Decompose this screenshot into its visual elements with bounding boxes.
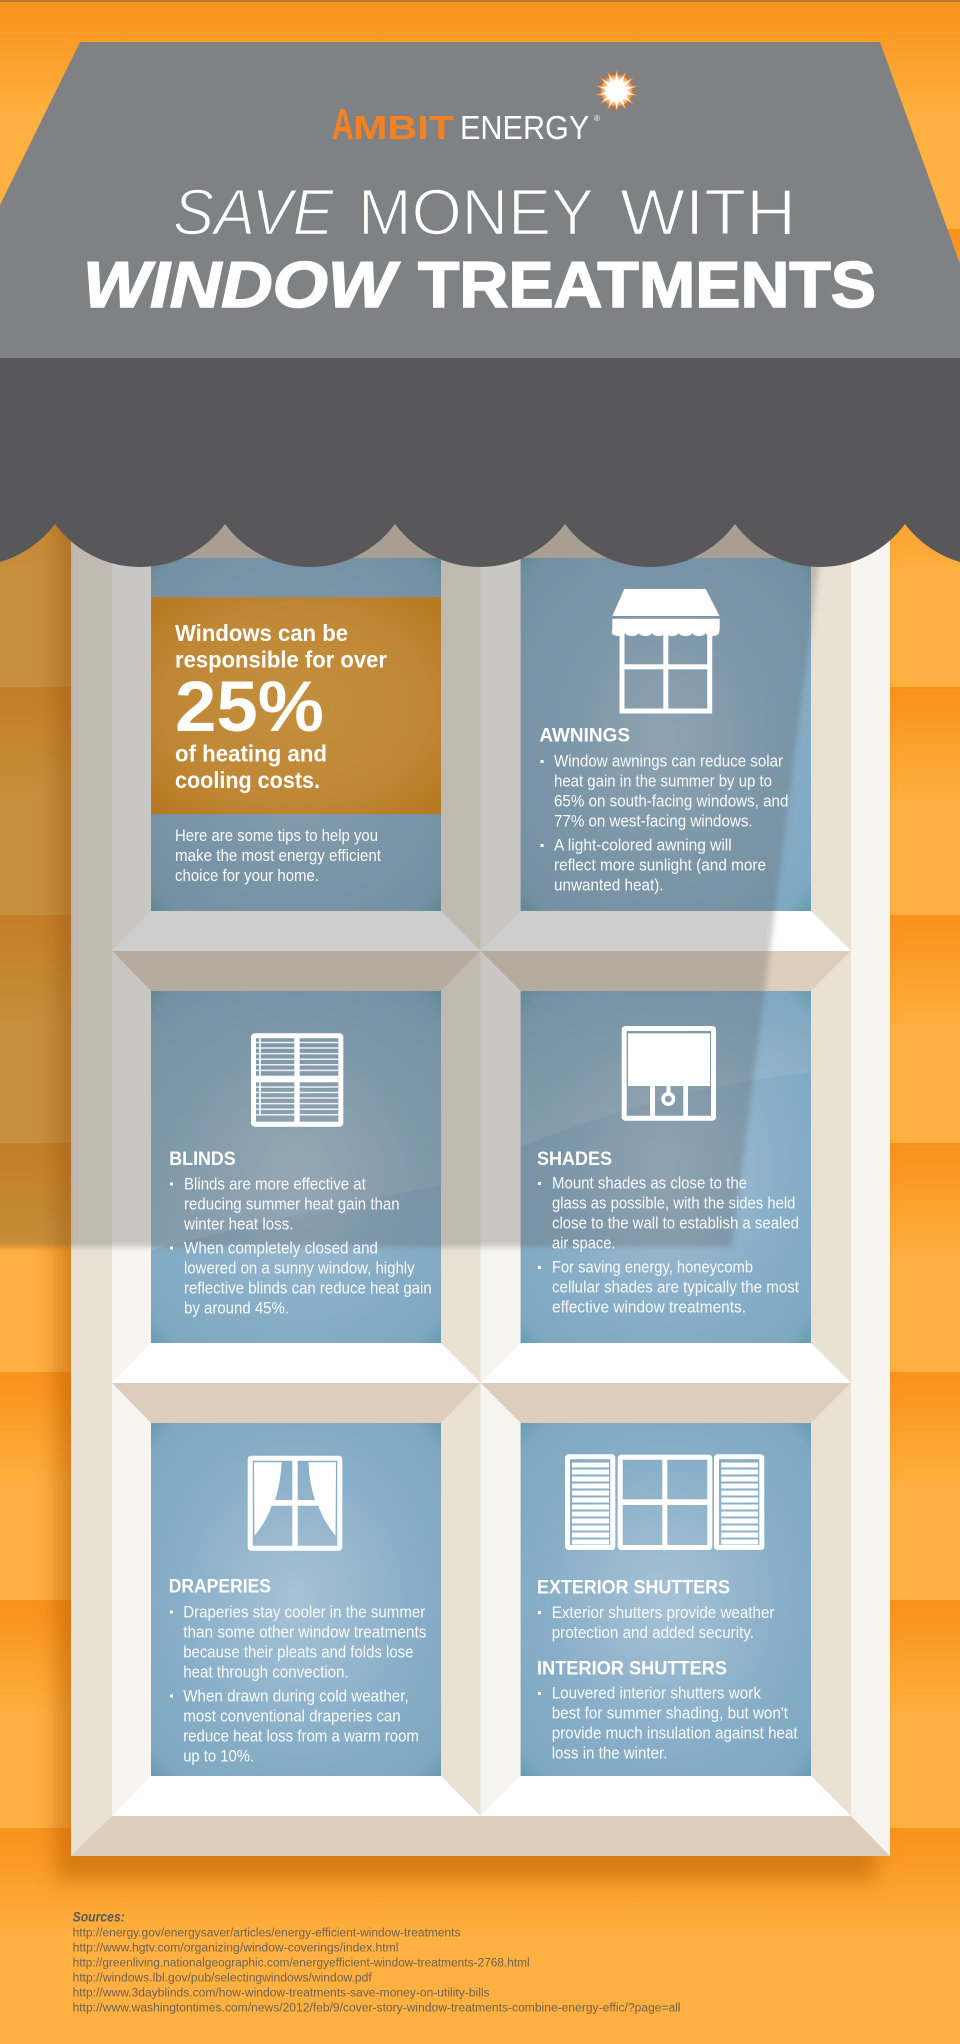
panel: shutters: loss in the winter. xyxy=(552,1745,667,1763)
icon: exterior shutters xyxy=(568,1457,762,1548)
logo: Ambit Energy xyxy=(332,68,639,149)
panel: shutters: Louvered interior shutters work xyxy=(552,1685,762,1703)
awning valance with scallops xyxy=(0,358,960,567)
panel: intro callout text: responsible for over xyxy=(175,646,387,672)
panel: awnings: reflect more sunlight (and more xyxy=(554,857,766,875)
panel: shades: glass as possible, with the sides held xyxy=(552,1195,795,1213)
panel: draperies: up to 10%. xyxy=(183,1747,254,1765)
panel: shades: air space. xyxy=(552,1235,615,1253)
title: WITH xyxy=(620,177,796,249)
panel: blinds: reflective blinds can reduce heat gain xyxy=(184,1279,432,1297)
panel: blinds: reducing summer heat gain than xyxy=(184,1195,400,1213)
sources: http://greenliving.nationalgeographic.com/energyefficient-window-treatments-2768.html xyxy=(73,1958,530,1970)
sources: http://windows.lbl.gov/pub/selectingwindows/window.pdf xyxy=(73,1973,373,1985)
sources xyxy=(73,1909,681,2015)
awning roof xyxy=(0,42,960,358)
panel: awnings: 65% on south-facing windows, and xyxy=(554,793,788,811)
panel: blinds xyxy=(169,1036,432,1317)
panel: awnings: Window awnings can reduce solar xyxy=(554,753,783,771)
panel: intro callout text: make the most energy efficient xyxy=(175,847,381,865)
panel: draperies: most conventional draperies can xyxy=(183,1707,401,1725)
panel: shades xyxy=(537,1028,799,1317)
panel: draperies: because their pleats and folds lose xyxy=(183,1643,414,1661)
panel: shutters xyxy=(537,1457,798,1763)
panel: awnings: heat gain in the summer by up to xyxy=(554,773,772,791)
panel: shutters: INTERIOR SHUTTERS xyxy=(537,1659,727,1680)
panel: draperies: Draperies stay cooler in the summer xyxy=(183,1603,426,1621)
panel: shutters: Exterior shutters provide weather xyxy=(552,1604,775,1622)
panel: intro callout text: Windows can be xyxy=(175,620,348,646)
sources: Sources: xyxy=(73,1909,125,1925)
logo: Ambit Energy: ENERGY xyxy=(460,109,589,146)
panel: blinds: lowered on a sunny window, highly xyxy=(184,1259,415,1277)
panel: shades: effective window treatments. xyxy=(552,1299,746,1317)
title xyxy=(83,177,876,321)
panel: shutters: EXTERIOR SHUTTERS xyxy=(537,1577,730,1598)
icon: awning over window xyxy=(612,589,720,711)
panel: shades: SHADES xyxy=(537,1149,612,1170)
title: SAVE xyxy=(173,177,335,249)
sources: http://www.hgtv.com/organizing/window-coverings/index.html xyxy=(73,1943,398,1955)
panel: blinds: by around 45%. xyxy=(184,1299,289,1317)
panel: awnings: 77% on west-facing windows. xyxy=(554,813,753,831)
panel: shutters: protection and added security. xyxy=(552,1624,754,1642)
panel: awnings: unwanted heat). xyxy=(554,877,664,895)
logo: Ambit Energy: ® xyxy=(594,114,600,123)
title: WINDOW xyxy=(83,248,400,321)
icon: draperies xyxy=(250,1458,340,1548)
panel: intro callout text xyxy=(175,620,387,885)
window drop shadow xyxy=(56,500,876,1880)
panel: shades: close to the wall to establish a sealed xyxy=(552,1215,799,1233)
panel: blinds: BLINDS xyxy=(169,1149,236,1170)
title: MONEY xyxy=(358,177,594,249)
icon: sun burst xyxy=(594,68,639,113)
panel: awnings: AWNINGS xyxy=(539,726,630,747)
panel: awnings xyxy=(539,589,788,895)
panel: awnings: A light-colored awning will xyxy=(554,837,732,855)
window glass panes xyxy=(151,558,811,1776)
panel: shutters: best for summer shading, but won't xyxy=(552,1705,788,1723)
sources: http://energy.gov/energysaver/articles/energy-efficient-window-treatments xyxy=(73,1928,461,1940)
panel: intro callout text: cooling costs. xyxy=(175,767,320,793)
panel: draperies: than some other window treatments xyxy=(183,1623,426,1641)
panel: draperies: reduce heat loss from a warm room xyxy=(183,1727,419,1745)
window frame xyxy=(71,500,890,1856)
orange callout box xyxy=(151,597,441,814)
logo: Ambit Energy: A xyxy=(332,100,354,149)
title: TREATMENTS xyxy=(418,248,876,321)
panel: draperies: heat through convection. xyxy=(183,1663,349,1681)
panel: intro callout text: of heating and xyxy=(175,741,327,767)
panel: blinds: winter heat loss. xyxy=(183,1215,294,1233)
panel: intro callout text: Here are some tips to help you xyxy=(175,827,378,845)
panel: draperies xyxy=(169,1458,426,1765)
panel: blinds: When completely closed and xyxy=(184,1239,378,1257)
panel: intro callout text: 25% xyxy=(175,668,324,747)
icon: roller shade xyxy=(624,1028,714,1118)
panel: shades: For saving energy, honeycomb xyxy=(552,1259,753,1277)
panel: blinds: Blinds are more effective at xyxy=(184,1175,366,1193)
panel: draperies: DRAPERIES xyxy=(169,1577,271,1598)
panel: shades: cellular shades are typically the most xyxy=(552,1279,799,1297)
logo: Ambit Energy: MBIT xyxy=(353,109,454,146)
panel: intro callout text: choice for your home. xyxy=(175,867,319,885)
panel: draperies: When drawn during cold weather, xyxy=(183,1687,409,1705)
cast shadow of awning xyxy=(0,480,830,1247)
panel: shutters: provide much insulation against heat xyxy=(552,1725,798,1743)
icon: blinds xyxy=(254,1036,341,1124)
sources: http://www.washingtontimes.com/news/2012/feb/9/cover-story-window-treatments-combine-energy-effic/?page=all xyxy=(73,2003,681,2015)
sources: http://www.3dayblinds.com/how-window-treatments-save-money-on-utility-bills xyxy=(73,1988,490,2000)
panel: shades: Mount shades as close to the xyxy=(552,1175,747,1193)
